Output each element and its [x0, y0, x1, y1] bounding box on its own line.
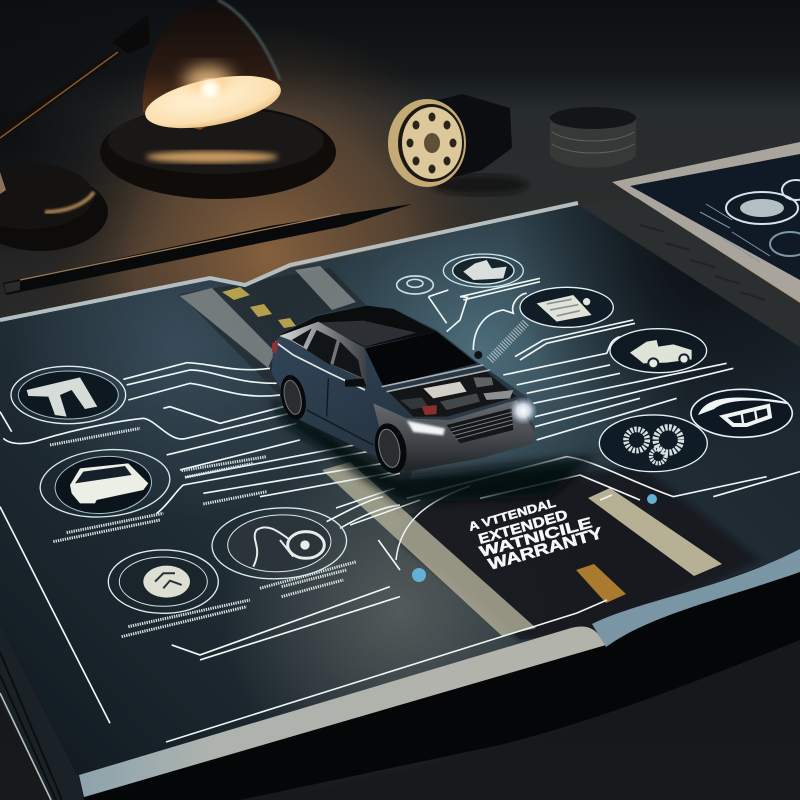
- car roof: [280, 306, 437, 347]
- icon: small rose: [397, 276, 433, 294]
- pen: [3, 204, 412, 295]
- car side windows: [292, 328, 362, 377]
- icon: wheel: [108, 550, 218, 613]
- icon: car: [37, 444, 173, 522]
- headlights: [407, 421, 445, 435]
- car shadow: [270, 397, 597, 503]
- window band and trim: [279, 322, 367, 387]
- warranty title: [467, 496, 605, 574]
- icon: gears: [599, 415, 707, 472]
- icon: top emblem: [443, 254, 523, 287]
- lamp arm: [0, 48, 122, 140]
- car body: [272, 305, 535, 472]
- icon: belt: [210, 505, 348, 582]
- icon: emblem: [691, 389, 792, 437]
- thin line above strip: [166, 600, 607, 742]
- warranty title: A VTTENDAL: [467, 496, 557, 534]
- taillight: [272, 340, 278, 353]
- gear part: [388, 94, 528, 195]
- book shadow and thickness: [82, 572, 800, 800]
- road stripes: [322, 462, 536, 636]
- icon: joint: [11, 366, 126, 424]
- mirrors: [345, 378, 367, 387]
- tablet: [612, 142, 800, 305]
- desk lamp: [0, 0, 336, 199]
- icon: document: [520, 287, 613, 327]
- open book: [0, 198, 800, 800]
- top page border: [0, 203, 578, 320]
- grille: [447, 408, 513, 443]
- car: [270, 305, 597, 503]
- lower strip: [79, 626, 606, 797]
- car front: [373, 400, 535, 472]
- engine bay: [388, 372, 517, 417]
- door detail: [307, 378, 373, 445]
- page stack edge: [578, 198, 800, 350]
- second lamp base: [0, 163, 108, 251]
- circuit lines: right page: [380, 278, 800, 500]
- icon: tow truck: [610, 329, 707, 373]
- warranty title: WATNICILE: [478, 514, 594, 561]
- metal ring: [550, 107, 636, 168]
- callout dots: [412, 494, 657, 582]
- road: [180, 268, 534, 640]
- lamp base: [100, 105, 336, 199]
- extra lines: lower road area: [336, 486, 612, 560]
- windshield: [365, 332, 477, 387]
- warranty title: WARRANTY: [486, 525, 605, 574]
- wheels: [277, 373, 411, 476]
- lamp shade: [143, 0, 281, 130]
- circuit lines: left page: [0, 363, 400, 723]
- text dashes: [50, 428, 357, 637]
- warranty title: EXTENDED: [476, 506, 569, 547]
- pages: [0, 205, 800, 775]
- lamp bulb opening: [141, 66, 285, 138]
